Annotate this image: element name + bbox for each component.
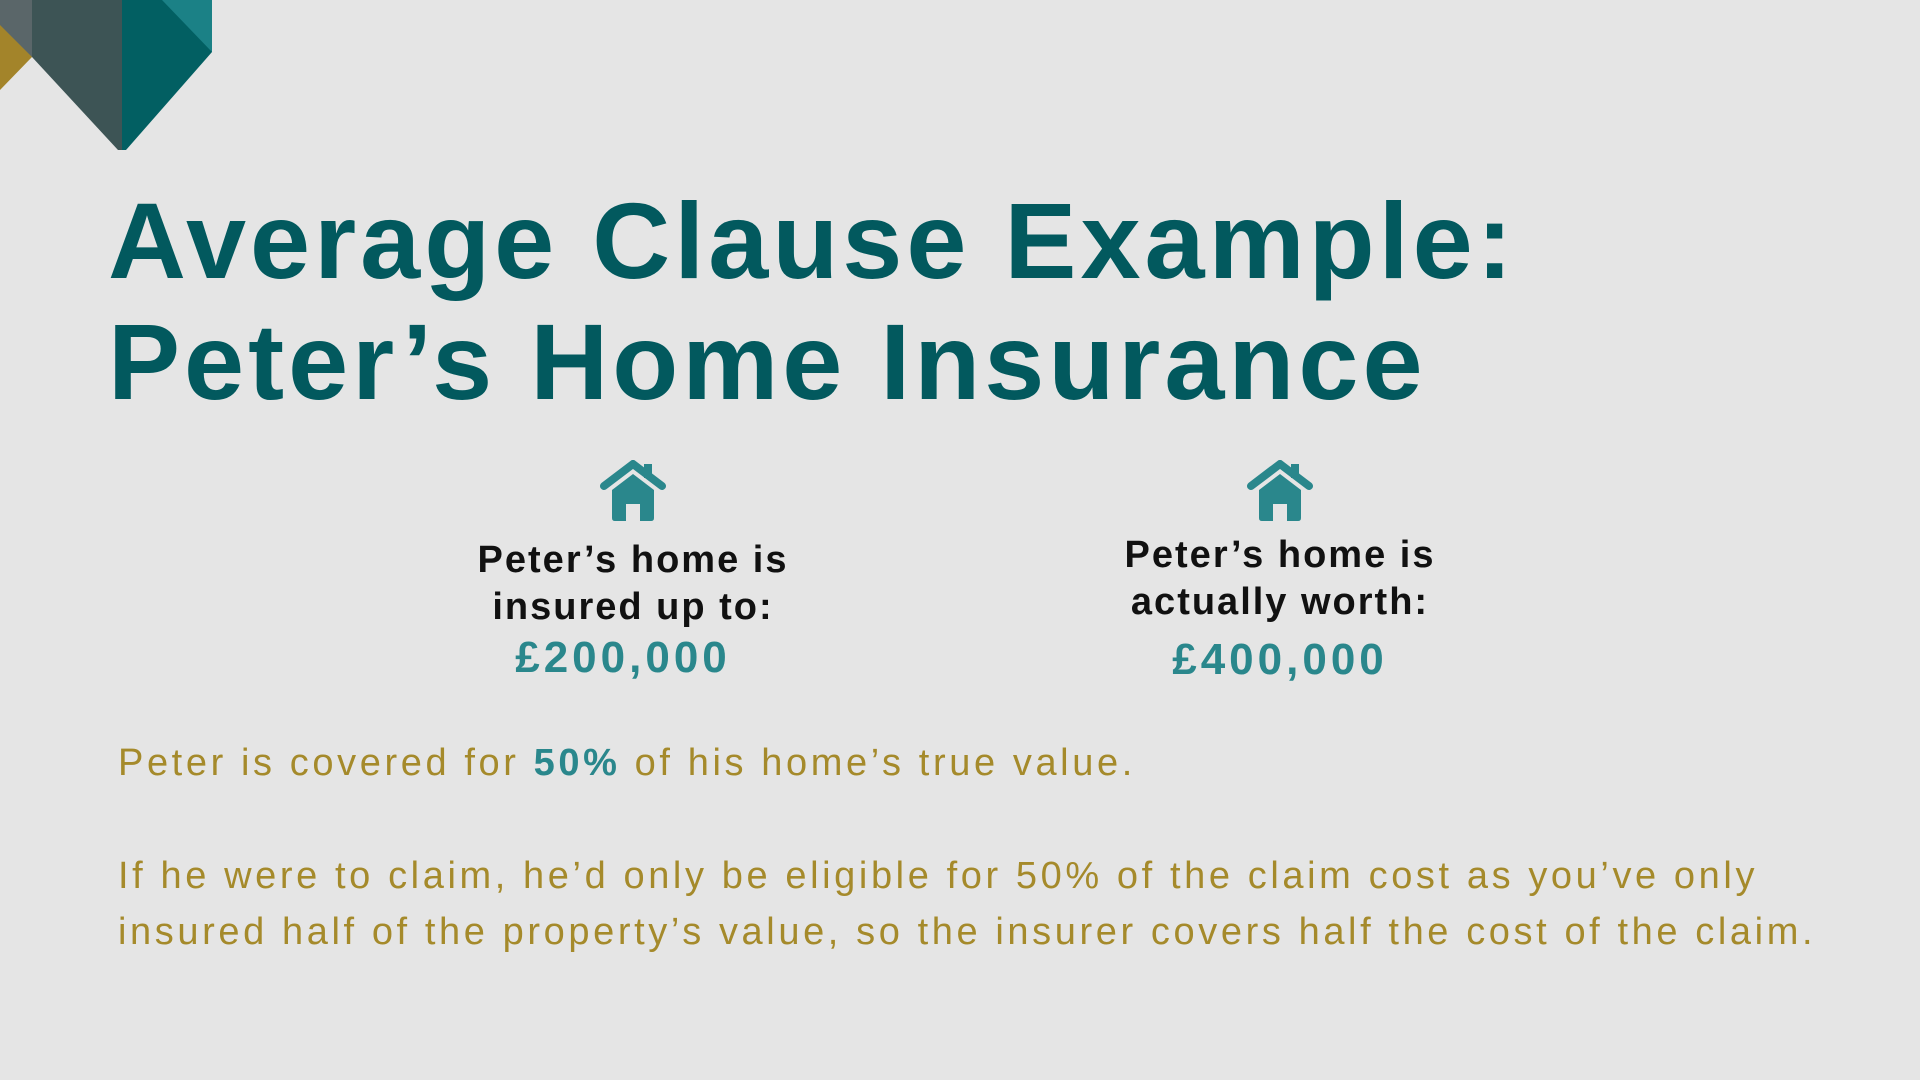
card: insured: £200,000 <box>515 633 731 682</box>
text: explanation <box>118 855 1816 953</box>
logo <box>0 0 212 150</box>
icon: house <box>600 460 666 521</box>
text: explanation: If he were to claim, he’d only be eligible for 50% of the claim cost as you’ve only <box>118 855 1758 897</box>
text: coverage statement: Peter is covered for 50% of his home’s true value. <box>118 742 1136 784</box>
title: Average Clause Example: <box>108 180 1517 301</box>
card: insured: Peter’s home is <box>478 539 788 581</box>
card: worth <box>1125 460 1435 684</box>
icon: house <box>1247 460 1313 521</box>
card: worth: actually worth: <box>1131 581 1429 623</box>
title <box>108 180 1517 422</box>
card: worth: Peter’s home is <box>1125 534 1435 576</box>
card: insured: insured up to: <box>492 586 774 628</box>
card: insured <box>478 460 788 682</box>
text: explanation: insured half of the property’s value, so the insurer covers half the cost of the claim. <box>118 911 1816 953</box>
card: worth: £400,000 <box>1172 635 1388 684</box>
title: Peter’s Home Insurance <box>108 301 1427 422</box>
